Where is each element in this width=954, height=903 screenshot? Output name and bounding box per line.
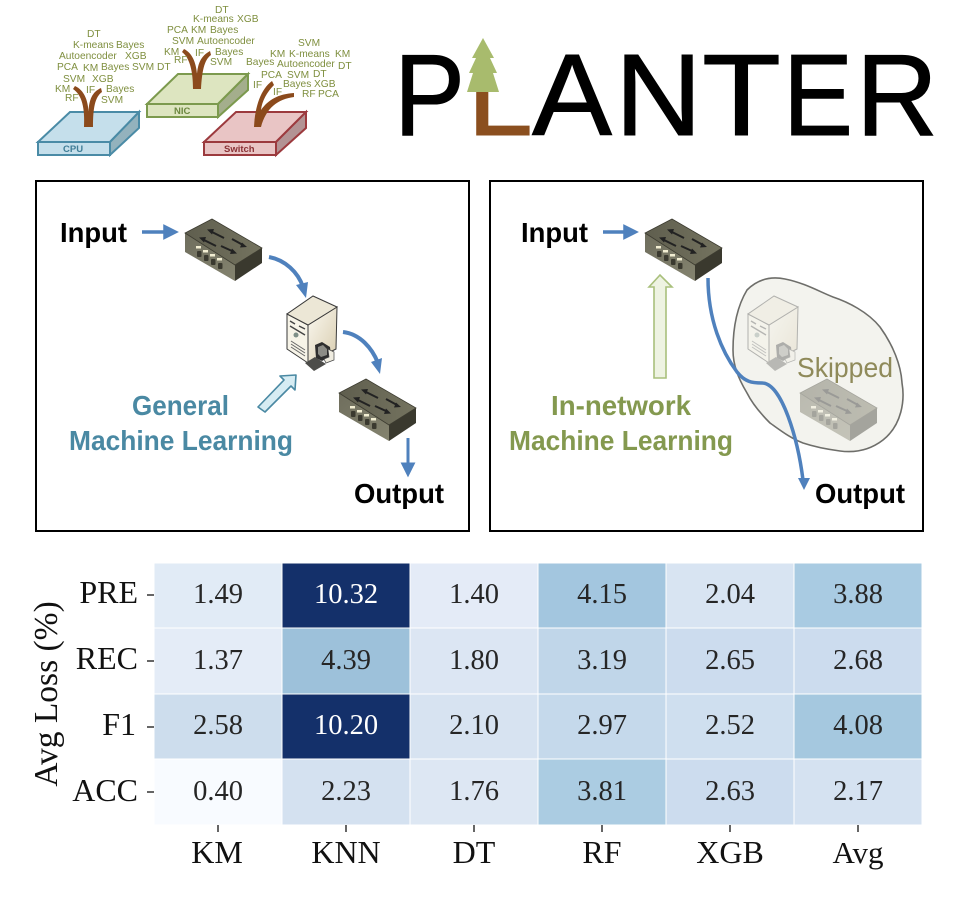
heatmap values: 2.68: [833, 645, 883, 676]
label: General Machine Learning: General: [132, 390, 229, 421]
NIC model labels: PCA: [167, 25, 188, 36]
icon: server: [287, 296, 337, 371]
x axis column labels: DT: [453, 834, 496, 870]
label: In-network Machine Learning: Machine Learning: [509, 425, 733, 456]
y axis title: Avg Loss (%): [28, 601, 65, 787]
Switch model labels: KM: [335, 49, 350, 60]
icon: tree with brown L trunk: L: [467, 30, 533, 160]
Switch model labels: SVM: [298, 38, 320, 49]
Switch model labels: Bayes: [283, 79, 311, 90]
Switch model labels: IF: [253, 80, 262, 91]
title: PLANTER logo: N: [615, 30, 702, 160]
heatmap values: 2.04: [705, 579, 755, 610]
icon: skipped server: [748, 296, 798, 371]
heatmap values: 2.63: [705, 776, 755, 807]
title: PLANTER logo: E: [783, 30, 853, 160]
y axis row labels: ACC: [72, 772, 138, 808]
panel: in-network machine learning: [490, 181, 923, 531]
NIC model labels: K-means: [193, 14, 234, 25]
CPU model labels: PCA: [57, 62, 78, 73]
heatmap values: 1.40: [449, 579, 499, 610]
heatmap values: 2.10: [449, 710, 499, 741]
NIC device: NIC: [174, 106, 190, 117]
CPU model labels: DT: [87, 29, 101, 40]
title: PLANTER logo: [394, 30, 938, 160]
title: PLANTER logo: R: [856, 30, 938, 160]
title: PLANTER logo: T: [702, 30, 781, 160]
Switch device: [204, 112, 306, 155]
arrow: switch bypass to output: [708, 278, 810, 490]
CPU model labels: Bayes: [116, 40, 144, 51]
heatmap values: 1.37: [193, 645, 243, 676]
heatmap values: 1.49: [193, 579, 243, 610]
heatmap values: 2.52: [705, 710, 755, 741]
Switch model labels: DT: [338, 61, 352, 72]
y axis row labels: REC: [76, 640, 138, 676]
heatmap values: 10.20: [314, 710, 378, 741]
CPU model labels: Bayes: [106, 84, 134, 95]
Switch model labels: DT: [313, 69, 327, 80]
NIC model labels: SVM: [210, 57, 232, 68]
arrow: switch to server: [269, 257, 308, 298]
CPU model labels: [55, 29, 171, 106]
Switch model labels: SVM: [287, 70, 309, 81]
heatmap values: [193, 579, 883, 807]
panel: general machine learning: [36, 181, 469, 531]
Switch model labels: XGB: [314, 79, 336, 90]
Switch model labels: PCA: [261, 70, 282, 81]
CPU device: CPU: [63, 144, 83, 155]
heatmap values: 4.08: [833, 710, 883, 741]
NIC model labels: XGB: [237, 14, 259, 25]
y axis row labels: [72, 574, 138, 808]
heatmap values: 0.40: [193, 776, 243, 807]
Switch model labels: Bayes: [246, 57, 274, 68]
heatmap values: 1.80: [449, 645, 499, 676]
heatmap values: 3.81: [577, 776, 627, 807]
arrow: server to switch: [343, 332, 382, 374]
x axis column labels: KNN: [311, 834, 381, 870]
y axis row labels: PRE: [79, 574, 138, 610]
title: PLANTER logo: P: [394, 30, 465, 160]
NIC model labels: KM: [191, 25, 206, 36]
icon: skipped switch: [800, 379, 877, 441]
Switch model labels: K-means: [289, 49, 330, 60]
illustration: machine learning models growing on CPU, NIC and switch: [38, 5, 352, 155]
icon: root branches: [73, 49, 294, 127]
NIC model labels: RF: [174, 55, 188, 66]
CPU model labels: SVM: [132, 62, 154, 73]
CPU model labels: Autoencoder: [59, 51, 117, 62]
CPU model labels: K-means: [73, 40, 114, 51]
label: In-network Machine Learning: [509, 390, 733, 456]
CPU model labels: KM: [55, 84, 70, 95]
NIC model labels: Bayes: [210, 25, 238, 36]
NIC model labels: SVM: [172, 36, 194, 47]
Switch device: Switch: [224, 144, 255, 155]
NIC device: [147, 74, 248, 117]
heatmap values: 2.97: [577, 710, 627, 741]
NIC model labels: Bayes: [215, 47, 243, 58]
CPU model labels: XGB: [92, 74, 114, 85]
callout arrow: general ML to server: [258, 375, 296, 412]
icon: switch: [645, 219, 722, 281]
heatmap: average loss: [28, 563, 922, 870]
heatmap values: 2.23: [321, 776, 371, 807]
heatmap values: 4.39: [321, 645, 371, 676]
heatmap values: 2.65: [705, 645, 755, 676]
heatmap values: 2.17: [833, 776, 883, 807]
icon: switch: [185, 219, 262, 281]
NIC model labels: KM: [164, 47, 179, 58]
CPU model labels: DT: [157, 62, 171, 73]
heatmap values: 4.15: [577, 579, 627, 610]
heatmap values: 3.19: [577, 645, 627, 676]
CPU model labels: SVM: [63, 74, 85, 85]
Switch model labels: KM: [270, 49, 285, 60]
y axis row labels: F1: [102, 706, 136, 742]
label: Input: Input: [60, 217, 127, 248]
label: Output: Output: [815, 478, 905, 509]
NIC model labels: Autoencoder: [197, 36, 255, 47]
heatmap cells: [154, 563, 922, 825]
x axis column labels: XGB: [696, 834, 764, 870]
heatmap values: 2.58: [193, 710, 243, 741]
CPU model labels: RF: [65, 93, 79, 104]
blob: skipped region: [733, 278, 903, 452]
heatmap values: 1.76: [449, 776, 499, 807]
arrow: input to switch: [603, 227, 635, 237]
x axis column labels: RF: [582, 834, 622, 870]
label: Skipped: Skipped: [797, 352, 893, 383]
NIC model labels: DT: [215, 5, 229, 16]
x axis column labels: Avg: [832, 835, 884, 870]
CPU model labels: XGB: [125, 51, 147, 62]
Switch model labels: Autoencoder: [277, 59, 335, 70]
icon: switch: [339, 379, 416, 441]
title: PLANTER logo: A: [532, 30, 613, 160]
NIC model labels: IF: [195, 48, 204, 59]
x axis column labels: [191, 834, 884, 870]
Switch model labels: [246, 38, 352, 100]
heatmap values: 3.88: [833, 579, 883, 610]
label: Input: Input: [521, 217, 588, 248]
CPU device: [38, 112, 139, 155]
CPU model labels: SVM: [101, 95, 123, 106]
arrow: output: [403, 438, 413, 474]
x axis column labels: KM: [191, 834, 243, 870]
Switch model labels: RF: [302, 89, 316, 100]
Switch model labels: PCA: [318, 89, 339, 100]
arrow: input to switch: [142, 227, 175, 237]
ticks: [147, 595, 858, 832]
label: In-network Machine Learning: In-network: [551, 390, 691, 421]
heatmap values: 10.32: [314, 579, 378, 610]
label: Output: Output: [354, 478, 444, 509]
label: General Machine Learning: [69, 390, 293, 456]
CPU model labels: IF: [86, 85, 95, 96]
CPU model labels: KM: [83, 63, 98, 74]
callout arrow: in-network ML to switch: [649, 275, 672, 378]
label: General Machine Learning: Machine Learning: [69, 425, 293, 456]
NIC model labels: [164, 5, 259, 68]
CPU model labels: Bayes: [101, 62, 129, 73]
Switch model labels: IF: [273, 87, 282, 98]
